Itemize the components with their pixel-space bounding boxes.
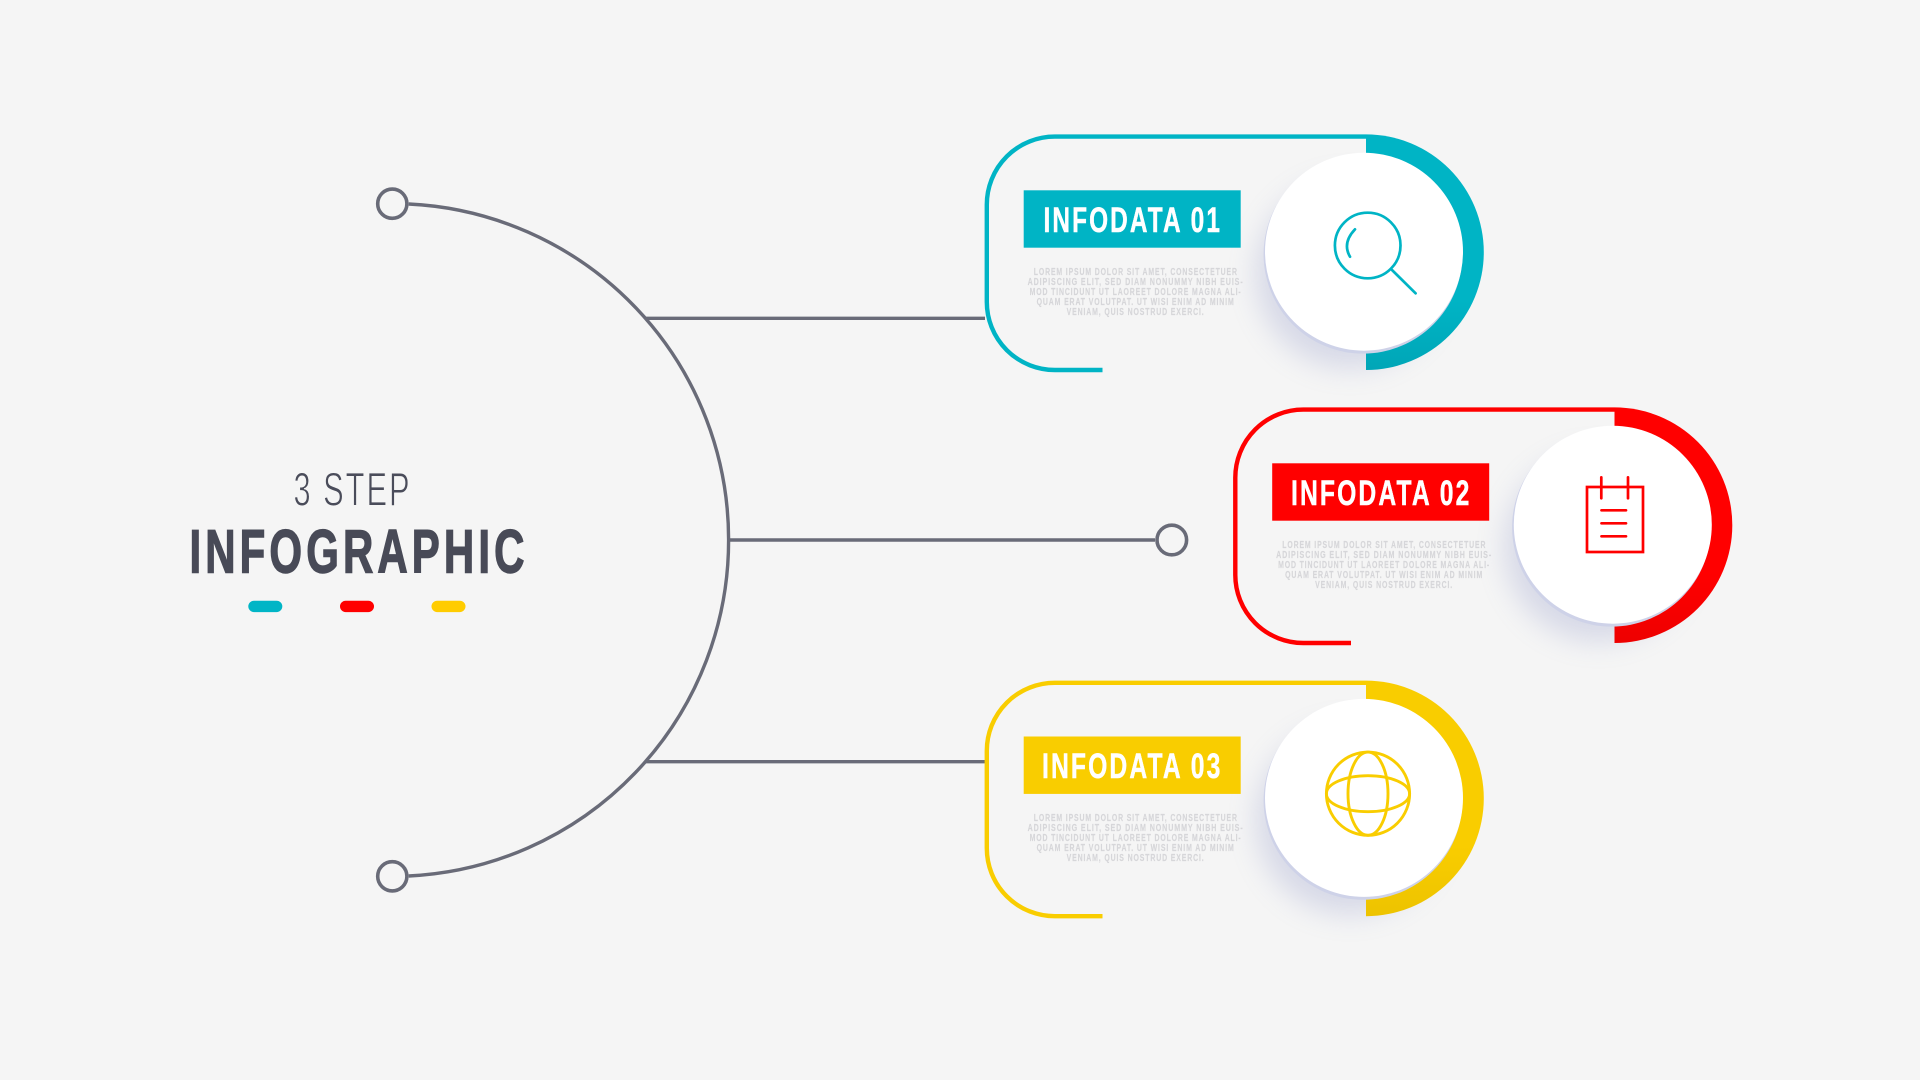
body text: ADIPISCING ELIT, SED DIAM NONUMMY NIBH EUIS- [1028, 823, 1244, 834]
heading: infographic: INFOGRAPHIC [190, 517, 528, 586]
badge [1024, 736, 1241, 794]
panel: infodata 01 [987, 134, 1484, 370]
badge [1024, 190, 1241, 248]
connector: semicircle timeline [378, 189, 1187, 891]
icon: notepad [1587, 477, 1643, 552]
circle shadow [1256, 180, 1444, 368]
badge label: INFODATA 01 [1044, 201, 1222, 240]
white circle [1264, 153, 1463, 354]
white circle [1512, 426, 1712, 627]
legend pills [248, 601, 466, 612]
body text: LOREM IPSUM DOLOR SIT AMET, CONSECTETUER [1282, 540, 1486, 551]
icon: globe [1326, 752, 1410, 835]
body text [1028, 267, 1244, 318]
thick arc [1366, 134, 1484, 370]
body text: LOREM IPSUM DOLOR SIT AMET, CONSECTETUER [1034, 267, 1238, 278]
body text [1276, 540, 1492, 591]
panel: infodata 02 [1235, 407, 1732, 643]
body text: MOD TINCIDUNT UT LAOREET DOLORE MAGNA ALI- [1030, 287, 1242, 298]
body text: ADIPISCING ELIT, SED DIAM NONUMMY NIBH EUIS- [1028, 277, 1244, 288]
body text: QUAM ERAT VOLUTPAT. UT WISI ENIM AD MINIM [1037, 843, 1235, 854]
body text: VENIAM, QUIS NOSTRUD EXERCI. [1067, 853, 1205, 864]
thick arc [1366, 681, 1484, 916]
card outline [987, 137, 1366, 370]
body text: MOD TINCIDUNT UT LAOREET DOLORE MAGNA ALI- [1278, 560, 1490, 571]
body text: QUAM ERAT VOLUTPAT. UT WISI ENIM AD MINIM [1037, 297, 1235, 308]
card outline [1235, 410, 1614, 643]
white circle [1264, 699, 1463, 900]
circle shadow [1504, 453, 1692, 641]
body text: VENIAM, QUIS NOSTRUD EXERCI. [1315, 580, 1453, 591]
icon: magnifier [1335, 213, 1416, 293]
panel: infodata 03 [987, 681, 1484, 916]
body text [1028, 813, 1244, 864]
thick arc [1614, 407, 1732, 643]
badge label: INFODATA 02 [1291, 474, 1472, 513]
body text: MOD TINCIDUNT UT LAOREET DOLORE MAGNA ALI- [1030, 833, 1242, 844]
body text: LOREM IPSUM DOLOR SIT AMET, CONSECTETUER [1034, 813, 1238, 824]
circle shadow [1256, 726, 1444, 914]
title [190, 462, 528, 586]
badge label: INFODATA 03 [1042, 747, 1222, 786]
body text: VENIAM, QUIS NOSTRUD EXERCI. [1067, 307, 1205, 318]
card outline [987, 683, 1366, 916]
heading: 3 step: 3 STEP [294, 462, 412, 516]
body text: ADIPISCING ELIT, SED DIAM NONUMMY NIBH EUIS- [1276, 550, 1492, 561]
body text: QUAM ERAT VOLUTPAT. UT WISI ENIM AD MINIM [1285, 570, 1483, 581]
badge [1272, 463, 1489, 521]
